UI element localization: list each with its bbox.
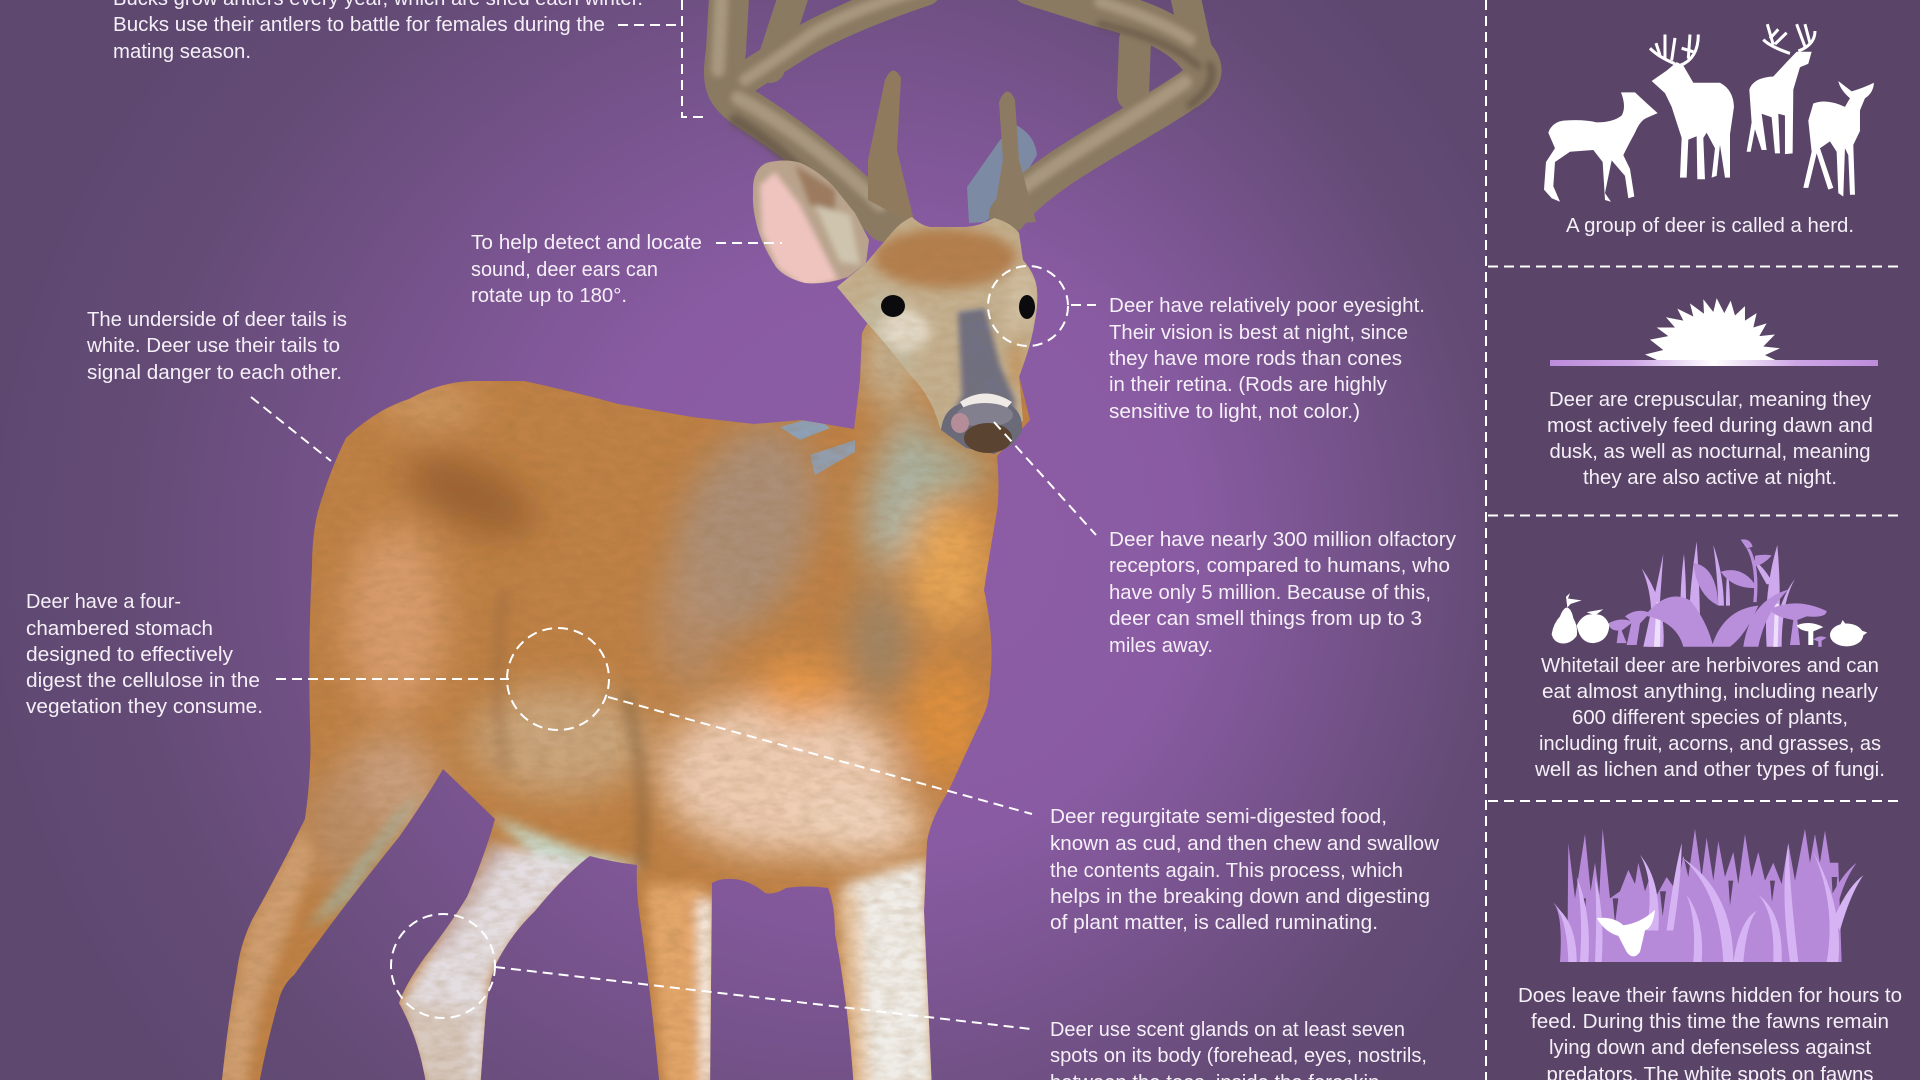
text: scent glands: spots on its body (forehead, eyes, nostrils, xyxy=(1050,1044,1427,1067)
text: rumination: known as cud, and then chew and swallow xyxy=(1050,832,1439,855)
text: herbivores: Whitetail deer are herbivores and can xyxy=(1541,654,1879,677)
text: tail xyxy=(86,308,347,384)
text: rumination: helps in the breaking down and digesting xyxy=(1050,885,1430,908)
eyes xyxy=(881,295,1035,319)
far ear xyxy=(967,125,1037,223)
text: rumination: the contents again. This process, which xyxy=(1050,859,1403,882)
text: eyesight xyxy=(1109,294,1425,423)
text: stomach: digest the cellulose in the xyxy=(26,669,260,692)
text: eyesight: in their retina. (Rods are highly xyxy=(1109,373,1388,396)
text: rumination: Deer regurgitate semi-digested food, xyxy=(1050,805,1387,828)
right brow tine xyxy=(992,91,1036,225)
text: stomach: designed to effectively xyxy=(26,643,234,666)
head xyxy=(837,217,1038,448)
text: herbivores: well as lichen and other types of fungi. xyxy=(1534,758,1885,781)
text: fawns: lying down and defenseless against xyxy=(1549,1036,1871,1059)
text: scent glands xyxy=(1050,1018,1427,1080)
text: crepuscular: Deer are crepuscular, meaning they xyxy=(1549,388,1872,411)
icon: deer herd xyxy=(1544,24,1874,202)
antlers xyxy=(718,0,1212,222)
callout: ear xyxy=(716,242,782,244)
icon: rising sun xyxy=(1550,298,1878,366)
text: crepuscular: they are also active at night. xyxy=(1583,466,1837,489)
icon: plants, fruit and fungi xyxy=(1552,539,1867,647)
text: eyesight: sensitive to light, not color.) xyxy=(1109,400,1360,423)
near ear xyxy=(752,160,869,284)
text: herbivores: 600 different species of plants, xyxy=(1572,706,1848,729)
text: smell: miles away. xyxy=(1109,634,1213,657)
callout: nose xyxy=(994,422,1096,535)
text: fawns: Does leave their fawns hidden for hours to xyxy=(1518,984,1902,1007)
text: herd: A group of deer is called a herd. xyxy=(1566,214,1854,237)
text: crepuscular: dusk, as well as nocturnal, meaning xyxy=(1550,440,1870,463)
callout: tail xyxy=(251,397,331,461)
text: eyesight: Deer have relatively poor eyesight. xyxy=(1109,294,1425,317)
text: ears: sound, deer ears can xyxy=(471,258,658,281)
text: eyesight: Their vision is best at night, since xyxy=(1109,321,1408,344)
callout: scent gland leader xyxy=(495,967,1031,1029)
text: tail: The underside of deer tails is xyxy=(87,308,347,331)
text: stomach xyxy=(26,590,263,718)
muzzle xyxy=(941,394,1022,454)
text: fawns xyxy=(1518,984,1902,1080)
callout: eye leader xyxy=(1071,304,1096,306)
text: rumination: of plant matter, is called ruminating. xyxy=(1050,911,1378,934)
text: stomach: chambered stomach xyxy=(26,617,213,640)
text: antlers: Bucks use their antlers to battle for females during the xyxy=(113,13,605,36)
text: smell: have only 5 million. Because of this, xyxy=(1109,581,1431,604)
text: smell: Deer have nearly 300 million olfactory xyxy=(1109,528,1457,551)
text: crepuscular: most actively feed during dawn and xyxy=(1547,414,1873,437)
callout: antlers xyxy=(618,0,708,117)
text: eyesight: they have more rods than cones xyxy=(1109,347,1402,370)
panel: right sidebar xyxy=(1486,0,1920,1080)
callout: scent gland circle xyxy=(391,914,495,1018)
text: herbivores xyxy=(1534,654,1885,781)
text: herbivores: eat almost anything, including nearly xyxy=(1542,680,1879,703)
text: fawns: feed. During this time the fawns remain xyxy=(1531,1010,1889,1033)
callout: stomach leader xyxy=(276,678,509,680)
text: ears: rotate up to 180°. xyxy=(471,284,627,307)
text: ears xyxy=(471,231,702,307)
text: ears: To help detect and locate xyxy=(471,231,702,254)
text: smell: receptors, compared to humans, who xyxy=(1109,554,1450,577)
callout: cud leader xyxy=(608,697,1032,814)
callout lines and circles xyxy=(251,0,1096,1029)
text: rumination xyxy=(1050,805,1439,934)
text: stomach: Deer have a four- xyxy=(26,590,181,613)
callout: eye circle xyxy=(988,266,1068,346)
text: antlers xyxy=(113,0,643,63)
left brow tine xyxy=(868,70,915,225)
text: tail: white. Deer use their tails to xyxy=(86,334,340,357)
text: smell xyxy=(1109,528,1457,657)
callout: stomach circle xyxy=(507,628,609,730)
text: tail: signal danger to each other. xyxy=(87,361,342,384)
text: stomach: vegetation they consume. xyxy=(26,695,263,718)
text: crepuscular xyxy=(1547,388,1873,489)
illustration: whitetail buck xyxy=(200,0,1212,1080)
text: smell: deer can smell things from up to 3 xyxy=(1109,607,1422,630)
text: herbivores: including fruit, acorns, and grasses, as xyxy=(1539,732,1881,755)
text: antlers: mating season. xyxy=(113,40,251,63)
text: scent glands: Deer use scent glands on at least seven xyxy=(1050,1018,1405,1041)
body xyxy=(200,290,1040,1080)
icon: fawn hidden in grass xyxy=(1553,829,1863,962)
